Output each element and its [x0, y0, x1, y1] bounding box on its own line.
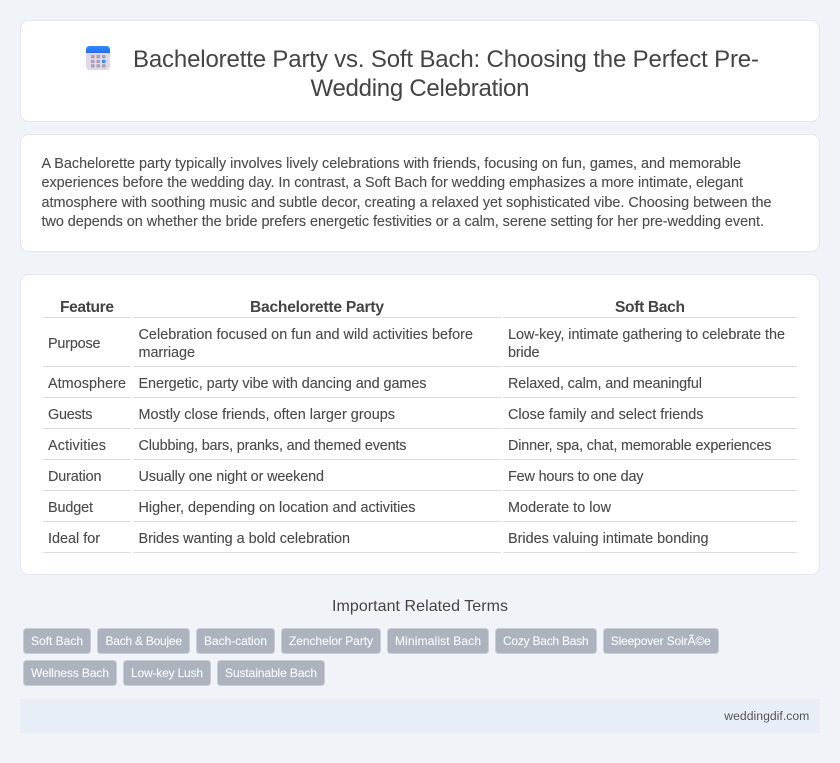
table row: budget: [48, 500, 612, 516]
title: Wedding Celebration: [310, 75, 530, 102]
table row: duration: Duration: [48, 469, 102, 485]
panel: introduction paragraph: [20, 134, 820, 252]
tag: Low-key Lush: [124, 660, 210, 686]
table row: purpose: Purpose: [48, 336, 100, 352]
table row: ideal for: [48, 531, 708, 547]
tag: Sustainable Bach: Sustainable Bach: [225, 666, 317, 680]
tag: Zenchelor Party: [282, 628, 380, 654]
title: [133, 46, 759, 102]
tag: Cozy Bach Bash: [496, 628, 596, 654]
title: Bachelorette Party vs. Soft Bach: Choosing the Perfect Pre-: [133, 46, 759, 73]
table row: guests: Mostly close friends, often larger groups: [138, 407, 395, 423]
tag: Low-key Lush: Low-key Lush: [131, 666, 203, 680]
tag: Bach & Boujee: [98, 628, 190, 654]
table row: purpose: [48, 327, 785, 361]
table row: activities: Clubbing, bars, pranks, and themed events: [138, 438, 406, 454]
text block: introduction: atmosphere with soothing music and subtle decor, creating a relaxed yet sophisticated vibe. Choosing between the: [42, 195, 772, 211]
table row: budget: Higher, depending on location and activities: [138, 500, 416, 516]
tag: Wellness Bach: [24, 660, 116, 686]
table row: ideal for: Brides wanting a bold celebration: [138, 531, 350, 547]
panel: title header: [20, 20, 820, 122]
table header row: [60, 299, 685, 316]
table row: duration: Usually one night or weekend: [138, 469, 324, 485]
icon: calendar: [86, 46, 110, 70]
tag: Bach & Boujee: Bach & Boujee: [106, 634, 182, 648]
footer source text: weddingdif.com: [723, 709, 809, 723]
table row: atmosphere: [48, 376, 702, 392]
table row: budget: Moderate to low: [508, 500, 612, 516]
tag: Bach-cation: [196, 628, 274, 654]
table row: guests: Guests: [48, 407, 92, 423]
table row: activities: [48, 438, 772, 454]
tag: Sleepover Soiree: Sleepover SoirÃ©e: [611, 634, 711, 648]
table row: purpose: Celebration focused on fun and wild activities before: [138, 327, 473, 343]
table row: ideal for: Brides valuing intimate bonding: [508, 531, 708, 547]
tag list: related terms: [24, 628, 718, 686]
table header row: Feature: [60, 299, 114, 316]
tag: Bach-cation: Bach-cation: [204, 634, 267, 648]
table row: purpose: bride: [508, 345, 540, 361]
tag: Sustainable Bach: [218, 660, 324, 686]
table row: atmosphere: Relaxed, calm, and meaningful: [508, 376, 702, 392]
table header row: Bachelorette Party: [250, 299, 384, 316]
table row: duration: [48, 469, 644, 485]
text block: introduction: [42, 156, 772, 230]
tag: Minimalist Bach: Minimalist Bach: [395, 634, 481, 648]
table row: purpose: marriage: [138, 345, 195, 361]
table row: purpose: Low-key, intimate gathering to celebrate the: [508, 327, 785, 343]
table row: guests: [48, 407, 704, 423]
tag: Soft Bach: Soft Bach: [31, 634, 83, 648]
table row: ideal for: Ideal for: [48, 531, 100, 547]
table row: activities: Activities: [48, 438, 106, 454]
tag: Soft Bach: [24, 628, 90, 654]
table row: guests: Close family and select friends: [508, 407, 704, 423]
table row: atmosphere: Energetic, party vibe with dancing and games: [138, 376, 426, 392]
tag: Zenchelor Party: Zenchelor Party: [289, 634, 373, 648]
text block: introduction: A Bachelorette party typically involves lively celebrations with friends, focusing on fun, games, and memorable: [42, 156, 741, 172]
table row: atmosphere: Atmosphere: [48, 376, 126, 392]
table row: duration: Few hours to one day: [508, 469, 644, 485]
table header row: Soft Bach: [615, 299, 685, 316]
tag: Sleepover Soiree: [604, 628, 718, 654]
footer: [20, 699, 820, 733]
heading: related terms: Important Related Terms: [332, 598, 508, 615]
panel: comparison table: [20, 274, 820, 574]
tag: Wellness Bach: Wellness Bach: [31, 666, 109, 680]
tag: Cozy Bach Bash: Cozy Bach Bash: [503, 634, 589, 648]
tag: Minimalist Bach: [388, 628, 488, 654]
text block: introduction: two depends on whether the bride prefers energetic festivities or a calm, serene setting for her pre-wedding event.: [42, 214, 764, 230]
table row: budget: Budget: [48, 500, 93, 516]
text block: introduction: experiences before the wedding day. In contrast, a Soft Bach for wedding emphasizes a more intimate, elegant: [42, 175, 743, 191]
table row: activities: Dinner, spa, chat, memorable experiences: [508, 438, 772, 454]
